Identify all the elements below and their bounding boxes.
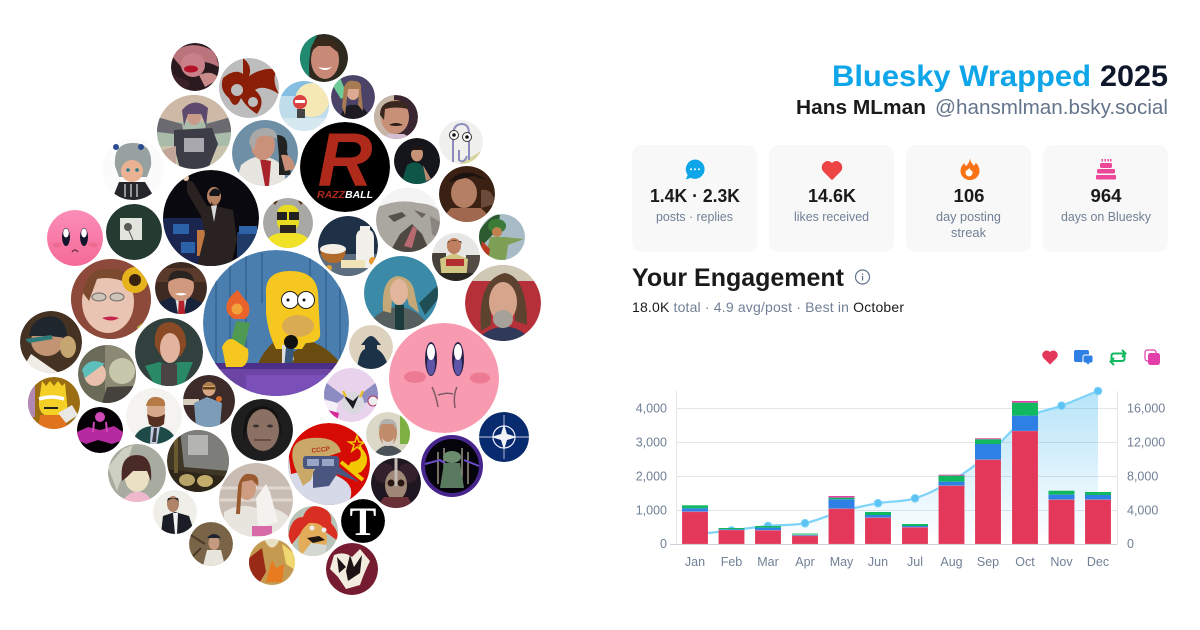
icon: chat bubble	[685, 160, 705, 179]
avatar: woman with red lips	[171, 43, 219, 91]
avatar: knit-hat doll	[113, 143, 152, 200]
avatar: man with red tie	[155, 262, 207, 314]
avatar: New York Times T logo: T	[350, 499, 377, 544]
avatar: Soviet dolphin pilot	[288, 423, 370, 505]
avatar: Razzball logo: RAZZBALL	[317, 189, 373, 201]
avatar: red dragon emblem	[219, 58, 279, 118]
avatar: long-haired bearded man	[465, 265, 541, 341]
stat label: likes received	[794, 210, 869, 224]
avatar: redhead game character	[135, 318, 203, 386]
avatar: soldier figure	[479, 214, 525, 260]
panel: posts and replies	[632, 145, 757, 252]
icon: repost arrows	[1110, 350, 1126, 365]
month labels: Nov	[1050, 555, 1073, 569]
month labels: Jan	[685, 555, 705, 569]
bar: Oct	[1012, 401, 1038, 544]
right axis labels: 8,000	[1127, 470, 1158, 484]
icon: flame	[960, 158, 980, 180]
left axis labels: 4,000	[636, 402, 667, 416]
combo chart	[636, 387, 1165, 569]
engagement summary: 18.0K total · 4.9 avg/post · Best in October	[632, 299, 904, 315]
right axis labels: 4,000	[1127, 504, 1158, 518]
avatar: yellow horned cartoon	[263, 198, 313, 248]
avatar: dark-haired selfie	[439, 166, 495, 222]
month labels: Sep	[977, 555, 999, 569]
bar: May	[828, 496, 854, 544]
icon: info	[856, 270, 870, 284]
avatar: grey-haired smiling man	[366, 412, 410, 456]
stat label: posts · replies	[656, 210, 733, 224]
bar: Jan	[682, 505, 708, 544]
month labels	[685, 555, 1109, 569]
avatar: woman with teal cap and plant	[78, 345, 136, 403]
avatar: man in suit on stage	[163, 170, 259, 266]
cumulative line	[695, 387, 1102, 534]
bar: Mar	[755, 526, 781, 544]
stat label: day posting	[936, 210, 1001, 224]
month labels: Dec	[1087, 555, 1109, 569]
bar: Sep	[975, 438, 1001, 544]
stat value: 1.4K · 2.3K	[650, 186, 740, 206]
left axis labels: 2,000	[636, 470, 667, 484]
right axis labels	[1127, 402, 1165, 551]
cumulative area	[695, 391, 1098, 544]
heading: your engagement: Your Engagement	[632, 264, 845, 292]
stat value: 106	[954, 186, 984, 206]
month labels: May	[830, 555, 854, 569]
avatar: blonde woman in black	[331, 75, 375, 119]
avatar: cat with Santa hat	[376, 188, 440, 252]
avatar: woman with sunflower	[71, 259, 151, 339]
avatar: window and food photo	[167, 430, 229, 492]
display name: Hans MLman	[796, 97, 926, 119]
avatar: neon pink sketch	[77, 407, 123, 453]
panel: days on Bluesky	[1043, 145, 1168, 252]
avatar: Bart Simpson	[28, 377, 80, 429]
avatar: hood young person	[300, 34, 348, 82]
month labels: Aug	[940, 555, 963, 569]
avatar: man with cap among branches	[189, 522, 233, 566]
month labels: Oct	[1015, 555, 1035, 569]
icon: heart	[822, 161, 842, 180]
avatar: small pink Kirby	[47, 210, 103, 266]
stat label: days on Bluesky	[1061, 210, 1152, 224]
avatar: person-shaped silhouette	[349, 325, 393, 369]
avatar: red-hair cartoon	[288, 506, 338, 556]
month labels: Jul	[907, 555, 923, 569]
avatar bubble cluster	[20, 34, 541, 595]
stat label second line: streak	[951, 226, 987, 240]
avatar: dark green album cover	[106, 204, 162, 260]
bar: Jun	[865, 512, 891, 544]
left axis labels: 1,000	[636, 504, 667, 518]
left axis labels	[636, 402, 667, 551]
panel: day posting streak	[906, 145, 1031, 252]
avatar: moon animal crossing	[279, 81, 329, 131]
avatar: blonde woman blue sky	[364, 256, 438, 330]
panel: likes received	[769, 145, 894, 252]
avatar: race driver	[432, 233, 480, 281]
avatar: moustache man	[374, 95, 418, 139]
avatar: New York Times T logo	[341, 499, 385, 544]
stat value: 14.6K	[808, 186, 856, 206]
avatar: bearded man in suit	[126, 388, 182, 444]
icon: quote squares	[1145, 350, 1160, 365]
chart legend	[1043, 350, 1160, 366]
avatar: milk and dairy	[318, 216, 378, 276]
avatar: Homer Simpson with burning money	[203, 250, 349, 405]
avatar: winged knight	[324, 368, 378, 422]
avatar: woman dark background	[231, 399, 293, 461]
stat value: 964	[1090, 186, 1122, 206]
month labels: Jun	[868, 555, 888, 569]
bar: Aug	[938, 475, 964, 544]
left axis labels: 3,000	[636, 436, 667, 450]
right axis labels: 12,000	[1127, 436, 1165, 450]
icon: cake	[1096, 159, 1116, 180]
avatar: band-shirt person with purple hair	[157, 95, 231, 169]
avatar: man in black blazer	[153, 490, 197, 534]
bar: Feb	[718, 528, 744, 544]
bar: Jul	[902, 524, 928, 544]
title year: 2025	[1100, 60, 1168, 93]
avatar: skull-painted woman	[371, 458, 421, 508]
right axis labels: 0	[1127, 537, 1134, 551]
grid lines	[670, 391, 1118, 544]
avatar: NATO emblem	[479, 412, 529, 462]
bar: Nov	[1048, 491, 1074, 544]
right axis labels: 16,000	[1127, 402, 1165, 416]
left axis labels: 0	[660, 537, 667, 551]
avatar: Razzball logo: R	[318, 118, 373, 203]
avatar: man in navy cap	[20, 311, 82, 373]
avatar: Clippy paperclip	[439, 120, 483, 164]
avatar: woman with white dog	[219, 463, 293, 537]
icon: likes heart	[1043, 351, 1057, 364]
avatar: Yoda in the rain	[421, 435, 483, 497]
title: Bluesky Wrapped	[832, 60, 1091, 93]
avatar: Soviet dolphin pilot: CCCP	[311, 446, 331, 455]
avatar: kid with sunglasses	[183, 375, 235, 427]
stacked bars	[682, 401, 1111, 544]
avatar: man on telephone	[232, 120, 298, 187]
month labels: Feb	[721, 555, 742, 569]
month labels: Apr	[795, 555, 815, 569]
bar: Dec	[1085, 492, 1111, 544]
icon: replies bubbles	[1074, 350, 1093, 366]
avatar: Lain anime girl	[108, 444, 166, 502]
month labels: Mar	[757, 555, 779, 569]
avatar: Razzball logo	[300, 118, 390, 212]
avatar: fiery warrior art	[249, 539, 295, 585]
avatar: maroon griffin crest	[326, 543, 378, 595]
handle: @hansmlman.bsky.social	[935, 97, 1168, 119]
avatar: woman in green dress	[394, 138, 440, 184]
avatar: big pink Kirby	[389, 323, 499, 433]
bar: Apr	[792, 533, 818, 544]
